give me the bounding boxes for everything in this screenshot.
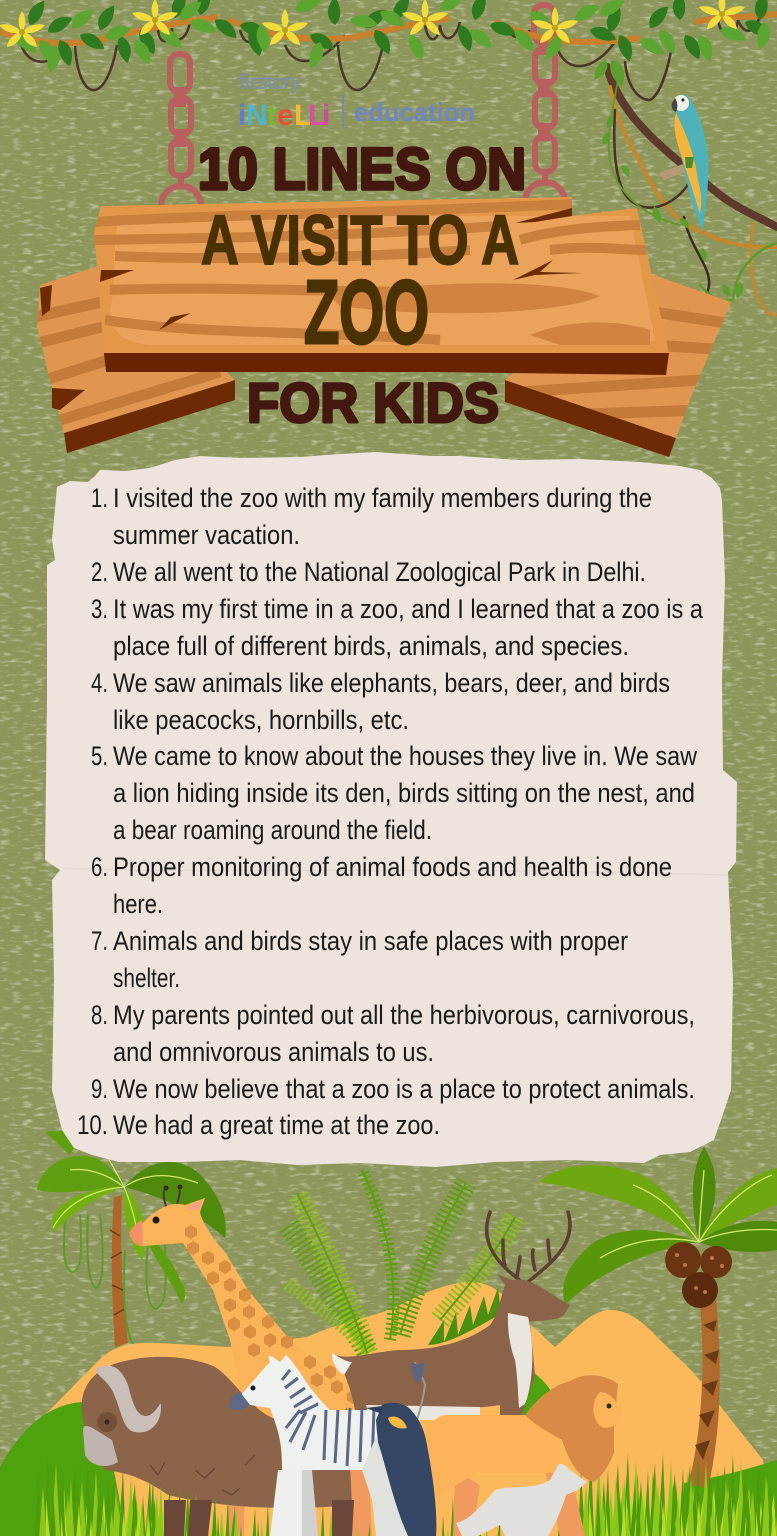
item 1: 1. [91,483,108,513]
musk ox legs [164,1500,354,1536]
item 4: like peacocks, hornbills, etc. [113,705,409,735]
logo: t [267,99,277,132]
title line: a visit to a: A VISIT TO A [201,201,519,279]
item 4 [91,668,670,735]
item 3: It was my first time in a zoo, and I learned that a zoo is a [113,594,703,624]
musk ox [82,1357,352,1508]
fern plants [287,1170,515,1353]
title line: 10 lines on: 10 LINES ON [198,137,526,202]
giraffe [129,1184,377,1536]
item 6: here. [113,889,163,919]
item 8 [91,1000,695,1067]
item 6 [91,852,672,919]
hanging chains [161,5,565,226]
left back plank [30,262,235,453]
item 1: I visited the zoo with my family members during the [113,483,652,513]
deer [332,1212,570,1420]
right palm tree [540,1147,777,1488]
zebra [229,1355,395,1536]
torn paper panel [45,452,737,1167]
vine branches at right [607,45,777,337]
wooden sign [30,197,740,457]
left palm tree [37,1128,226,1347]
green hills [0,1370,777,1536]
lion [425,1375,622,1536]
item 6: Proper monitoring of animal foods and health is done [113,852,672,882]
item 7: shelter. [113,963,180,993]
item 8: 8. [91,1000,108,1030]
item 7: Animals and birds stay in safe places with proper [113,926,628,956]
small white fox [456,1464,587,1536]
title line: for kids: FOR KIDS [247,371,499,434]
item 10: We had a great time at the zoo. [113,1110,440,1140]
item 5: a bear roaming around the field. [113,815,432,845]
item 9: 9. [91,1074,108,1104]
item 7 [91,926,628,993]
item 2: We all went to the National Zoological Park in Delhi. [113,557,646,587]
parrot [659,94,708,231]
item 5: 5. [91,741,108,771]
item 3 [91,594,703,661]
logo: firstcry [239,71,301,94]
zoo scene [0,1128,777,1536]
logo: L [308,99,326,132]
logo: education [354,97,475,127]
right back plank [505,270,740,457]
item 8: My parents pointed out all the herbivorous, carnivorous, [113,1000,695,1030]
item 7: 7. [91,926,108,956]
title line: zoo: ZOO [304,263,429,363]
item 9: We now believe that a zoo is a place to protect animals. [113,1074,695,1104]
item 5 [91,741,698,845]
logo: e [277,99,294,132]
orange hills [40,1282,777,1536]
logo: L [294,99,312,132]
logo: i [238,99,246,132]
item 2: 2. [91,557,108,587]
vine leaves at right [591,58,744,299]
penguin [362,1403,436,1536]
item 5: We came to know about the houses they live in. We saw [113,741,698,771]
item 1 [91,483,652,550]
item 4: 4. [91,668,108,698]
item 1: summer vacation. [113,520,300,550]
logo: i [322,99,330,132]
logo: N [246,99,268,132]
item 10: 10. [77,1110,108,1140]
main plank [94,197,669,375]
item 3: place full of different birds, animals, and species. [113,631,629,661]
logo [238,71,475,132]
item 8: and omnivorous animals to us. [113,1037,434,1067]
item 6: 6. [91,852,108,882]
item 4: We saw animals like elephants, bears, deer, and birds [113,668,670,698]
item 3: 3. [91,594,108,624]
item 5: a lion hiding inside its den, birds sitting on the nest, and [113,778,695,808]
grass [35,1453,777,1536]
jungle garland [0,0,777,90]
